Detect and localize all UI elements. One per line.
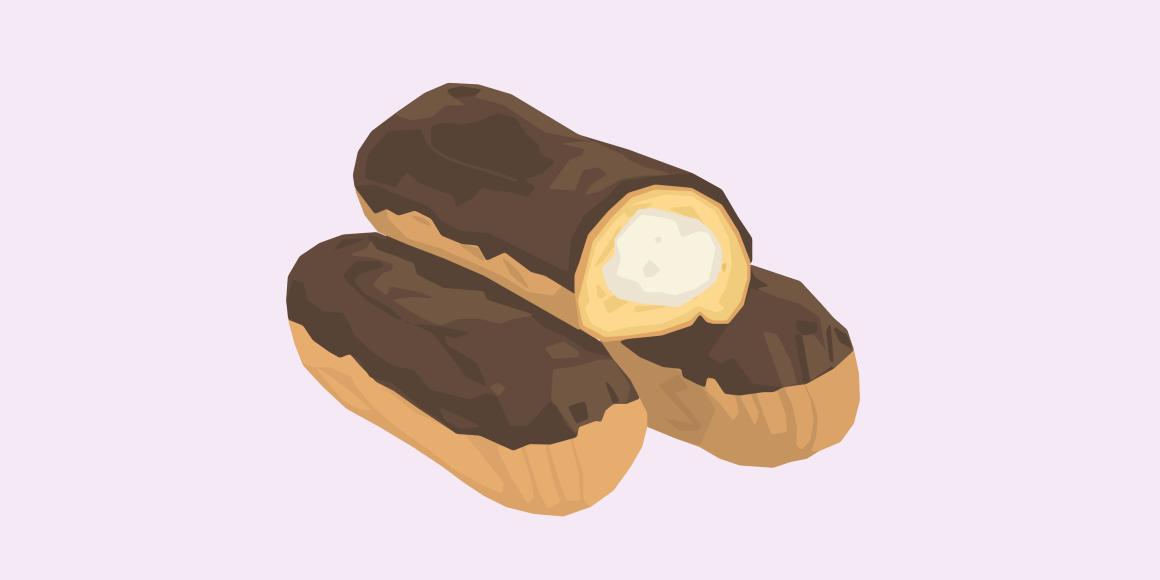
backing under the top eclair, closes the gap between eclairs: [387, 230, 583, 333]
eclair: back right: [600, 265, 859, 467]
cut end: crust and filling: [575, 185, 750, 342]
eclair: top with cut end: [353, 83, 752, 342]
eclair: front left: [287, 230, 647, 516]
